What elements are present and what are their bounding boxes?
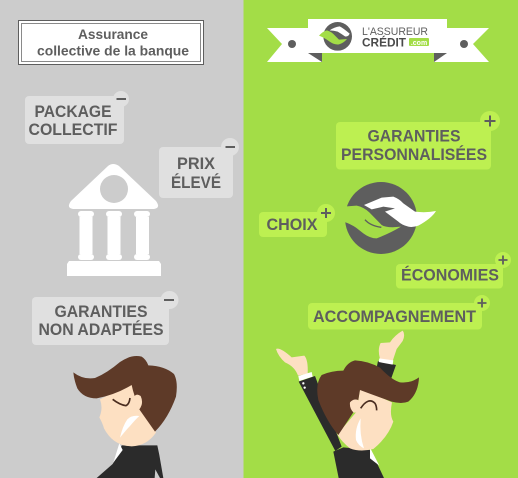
icon: bank building	[67, 164, 161, 276]
callout: économies: ÉCONOMIES	[401, 266, 499, 284]
closed eye	[113, 398, 130, 406]
mouth	[356, 418, 364, 448]
callout: choix: CHOIX	[266, 216, 318, 234]
finger slit	[365, 220, 381, 227]
white hand	[364, 197, 436, 227]
logo ribbon: L'Assureur Crédit: CRÉDIT	[362, 34, 407, 50]
right sleeve	[377, 361, 396, 380]
hair	[73, 356, 177, 432]
logo ribbon: L'Assureur Crédit	[267, 19, 489, 62]
left hand	[276, 349, 308, 376]
ribbon tails	[267, 28, 322, 62]
hair	[317, 360, 419, 435]
logo ribbon: L'Assureur Crédit: .com	[411, 40, 427, 47]
jacket	[333, 447, 384, 478]
callout: choix	[259, 204, 335, 237]
figure: sad man	[73, 356, 177, 478]
logo wordmark: L'ASSUREUR	[362, 26, 428, 38]
callout: prix élevé: ÉLEVÉ	[171, 173, 221, 192]
panel: banque background	[0, 0, 244, 478]
heading: banque title box: Assurance	[78, 26, 148, 42]
panel: assureur background	[244, 0, 518, 478]
smiling eye	[361, 401, 377, 410]
callout: package collectif: PACKAGE	[34, 103, 112, 121]
shirt collar	[113, 443, 123, 463]
ear	[134, 395, 143, 409]
callout: économies	[396, 252, 511, 288]
callout: accompagnement: ACCOMPAGNEMENT	[313, 308, 476, 326]
left cuff	[298, 372, 313, 381]
callout: prix élevé: PRIX	[177, 155, 215, 173]
heading: banque title box: collective de la banque	[37, 42, 189, 58]
callout: garanties non adaptées: NON ADAPTÉES	[38, 320, 164, 339]
mouth	[120, 416, 139, 438]
callout: garanties personnalisées: GARANTIES	[368, 128, 460, 146]
callout: garanties non adaptées: GARANTIES	[54, 303, 148, 321]
callout: garanties non adaptées	[32, 291, 178, 345]
callout: prix élevé	[159, 138, 239, 198]
green hand	[343, 206, 401, 238]
right cuff	[379, 358, 393, 365]
face	[99, 383, 156, 446]
shirt collar	[370, 448, 379, 466]
callout: garanties personnalisées: PERSONNALISÉES	[341, 145, 487, 164]
icon: large hands logo	[343, 182, 436, 254]
callout: package collectif: COLLECTIF	[28, 121, 118, 139]
figure: happy man	[276, 331, 419, 478]
callout: garanties personnalisées	[336, 111, 500, 170]
heading: banque title box	[18, 20, 204, 64]
callout: accompagnement	[308, 295, 490, 330]
right hand	[379, 331, 404, 361]
face	[337, 388, 393, 451]
jacket	[97, 445, 163, 478]
left sleeve	[299, 376, 342, 451]
logo mark	[319, 22, 352, 51]
ear	[349, 399, 360, 413]
callout: package collectif	[25, 91, 129, 144]
